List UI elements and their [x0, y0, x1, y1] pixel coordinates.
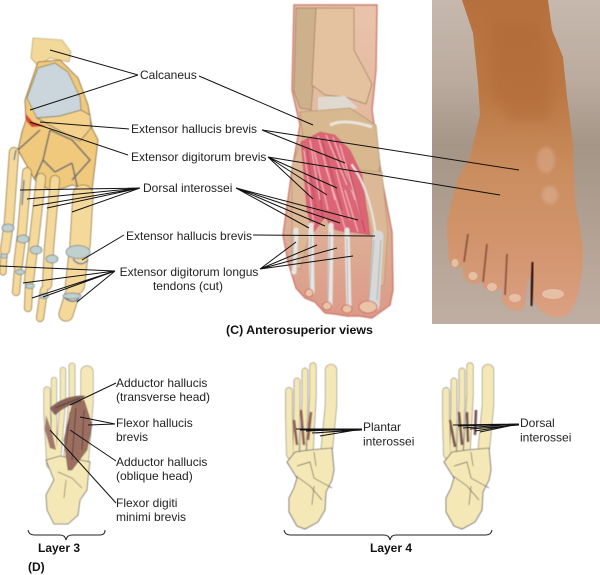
leader lines: dorsal interossei — [453, 424, 519, 432]
muscle: extensor brevis fan — [301, 132, 370, 235]
label: Adductor hallucis oblique head: (oblique head) — [116, 469, 193, 483]
metatarsals — [358, 170, 388, 290]
brace: layer 4 — [284, 530, 492, 540]
label: Extensor digitorum longus tendons: tendons (cut) — [153, 279, 223, 293]
metatarsals and toes — [3, 152, 83, 318]
talus articular surface — [27, 63, 81, 118]
foot surface — [447, 0, 583, 295]
label: Extensor digitorum longus tendons: Extensor digitorum longus — [120, 265, 258, 279]
label: Extensor hallucis brevis, forefoot: Extensor hallucis brevis — [126, 229, 252, 243]
tarsal bones — [18, 60, 98, 192]
illustration: layer 4 dorsal interossei foot — [444, 366, 491, 529]
muscle origin patch — [25, 113, 46, 127]
caption: anterosuperior views: (C) Anterosuperior views — [226, 323, 373, 337]
label: Adductor hallucis transverse head: Adductor hallucis — [116, 376, 207, 390]
label: Flexor hallucis brevis: brevis — [116, 430, 148, 444]
label: Extensor digitorum brevis: Extensor digitorum brevis — [131, 150, 266, 164]
label: Flexor hallucis brevis: Flexor hallucis — [116, 416, 193, 430]
calcaneus bone — [31, 38, 71, 66]
leader lines: layer 3 — [50, 383, 116, 503]
skin outline — [283, 5, 393, 318]
label: Dorsal interossei, layer 4: Dorsal — [520, 416, 555, 430]
photo background — [432, 0, 600, 324]
label: Plantar interossei: Plantar — [363, 420, 401, 434]
label: Flexor digiti minimi brevis: minimi brevis — [116, 510, 186, 524]
label: D: (D) — [28, 560, 45, 574]
label: Adductor hallucis oblique head: Adductor hallucis — [116, 455, 207, 469]
leg bones — [294, 8, 323, 110]
illustration: skeletal foot, anterosuperior view — [0, 38, 98, 318]
toenails — [452, 259, 564, 302]
label: Dorsal interossei, layer 4: interossei — [520, 430, 571, 444]
label: Plantar interossei: interossei — [363, 434, 414, 448]
label: Extensor hallucis brevis: Extensor hallucis brevis — [131, 122, 257, 136]
label: Flexor digiti minimi brevis: Flexor digiti — [116, 496, 177, 510]
leader lines: plantar interossei — [296, 429, 362, 436]
illustration: layer 4 plantar interossei foot — [287, 366, 334, 529]
dorsal muscles — [450, 410, 476, 447]
joint cartilage and tendon stubs — [0, 224, 90, 299]
label: Layer 4: Layer 4 — [370, 541, 412, 555]
label: Layer 3: Layer 3 — [38, 541, 80, 555]
muscles — [50, 396, 85, 415]
toe tips — [305, 289, 377, 313]
plantar muscles — [294, 410, 311, 445]
photo: living foot — [432, 0, 600, 324]
toes — [447, 222, 583, 317]
brace: layer 3 — [28, 530, 105, 540]
bones — [47, 366, 87, 465]
tendons — [294, 165, 378, 308]
illustration: layer 3 foot — [45, 366, 92, 524]
label: Calcaneus: Calcaneus — [140, 68, 197, 82]
highlights on tendons — [537, 147, 555, 173]
label: Dorsal interossei: Dorsal interossei — [143, 181, 232, 195]
label: Adductor hallucis transverse head: (transverse head) — [116, 390, 210, 404]
ankle shading — [490, 20, 552, 120]
leader lines: upper figure — [0, 50, 519, 302]
dark toe clefts — [464, 234, 507, 295]
ankle and tarsal bones — [318, 96, 358, 112]
illustration: anatomical foot with dorsal muscles — [283, 5, 393, 318]
